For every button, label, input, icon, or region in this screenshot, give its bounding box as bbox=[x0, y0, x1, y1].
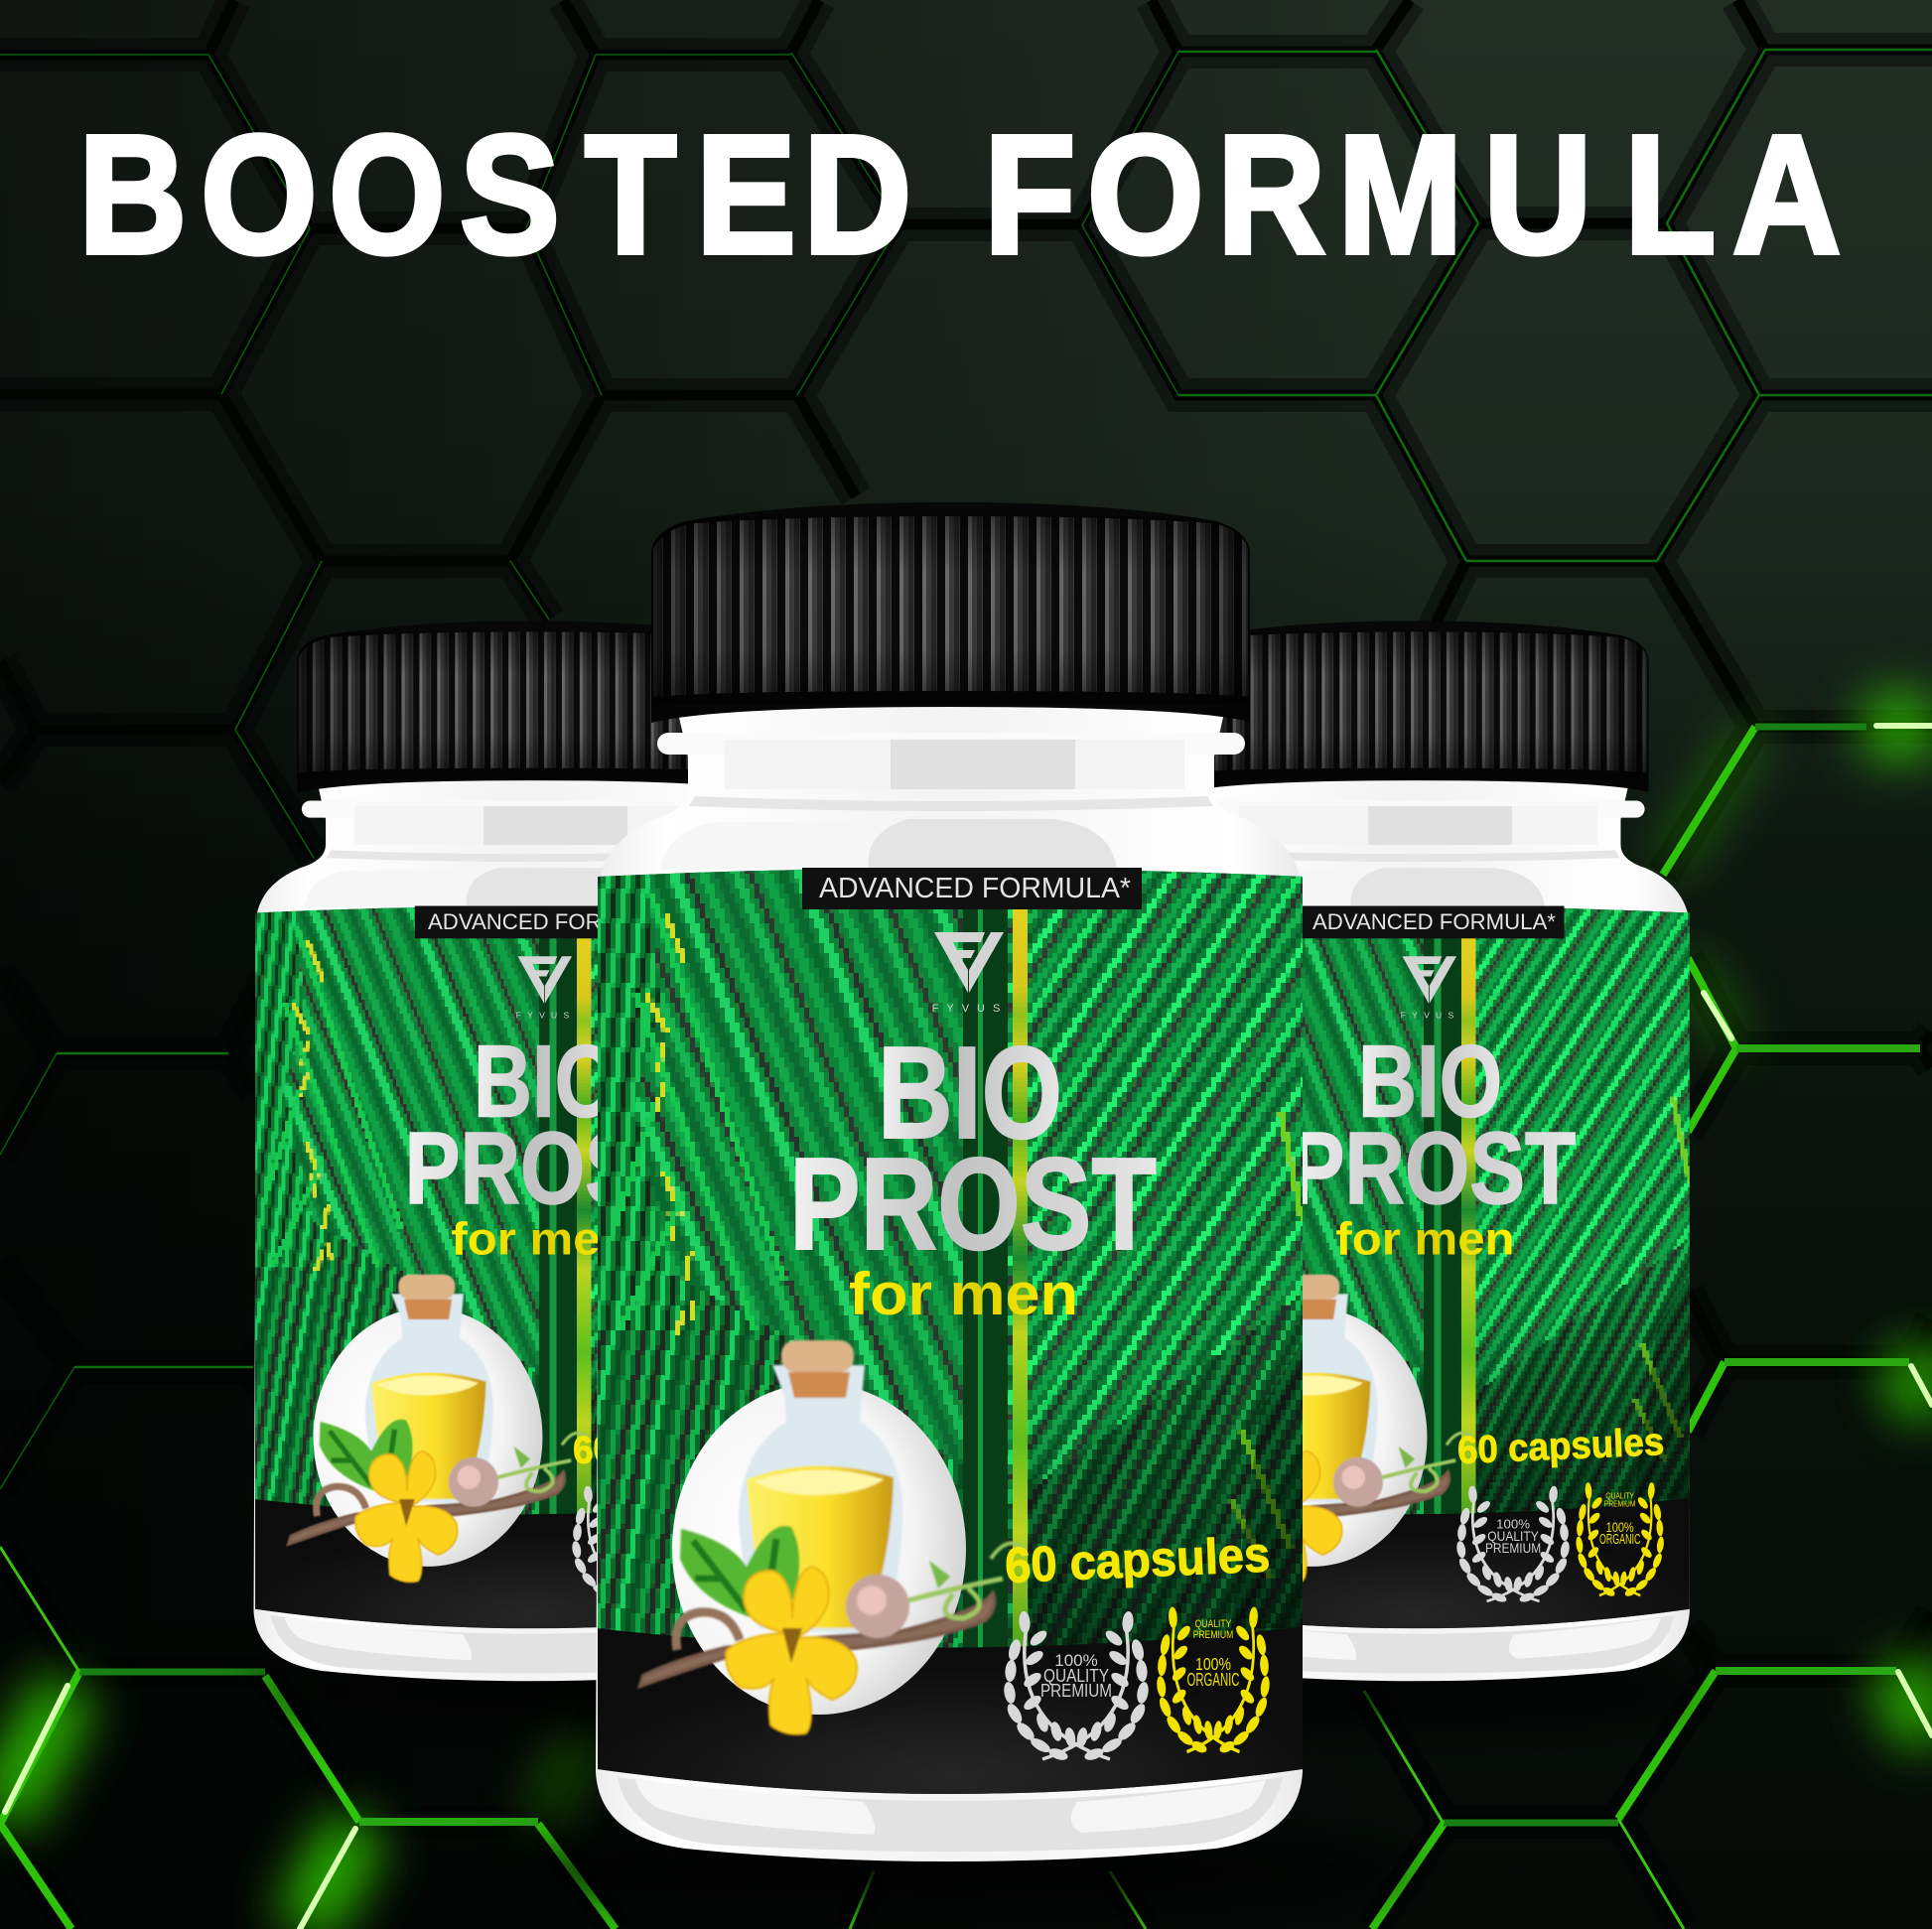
left bottle bbox=[253, 617, 808, 1681]
right bottle: silver badge: QUALITY bbox=[1487, 1528, 1539, 1544]
ground shadow bbox=[248, 1669, 1698, 1901]
center bottle: gold badge: QUALITY bbox=[1195, 1618, 1232, 1630]
right bottle: silver badge: 100% bbox=[1496, 1517, 1530, 1532]
right bottle: logo: FYVUS bbox=[1401, 1011, 1459, 1021]
right bottle: product name: BIO bbox=[1358, 1025, 1502, 1139]
right bottle: gold badge: 100% bbox=[1606, 1520, 1634, 1535]
right bottle: gold badge: ORGANIC bbox=[1599, 1531, 1640, 1547]
right bottle: product name bbox=[1290, 1025, 1576, 1265]
center bottle bbox=[596, 496, 1307, 1861]
right bottle: product name: for men bbox=[1335, 1213, 1515, 1265]
right bottle: advanced formula tag: ADVANCED FORMULA* bbox=[1312, 909, 1556, 934]
center bottle: product name: PROST bbox=[789, 1131, 1157, 1277]
left bottle: logo: FYVUS bbox=[516, 1011, 575, 1021]
left bottle: product name: BIO bbox=[474, 1025, 618, 1139]
left bottle: advanced formula tag: ADVANCED FORMULA* bbox=[428, 909, 671, 934]
right bottle: product name: PROST bbox=[1290, 1111, 1576, 1225]
right bottle: silver badge bbox=[1455, 1485, 1571, 1603]
center bottle: silver badge: QUALITY bbox=[1043, 1666, 1109, 1686]
left bottle: capsule count: 60 capsules bbox=[572, 1421, 780, 1472]
right bottle: silver badge: PREMIUM bbox=[1485, 1540, 1541, 1556]
center bottle: gold badge: PREMIUM bbox=[1193, 1629, 1233, 1641]
center bottle: advanced formula tag: ADVANCED FORMULA* bbox=[819, 873, 1131, 904]
center bottle: logo: FYVUS bbox=[932, 1003, 1008, 1015]
left bottle: product name: PROST bbox=[405, 1111, 691, 1225]
center bottle: gold badge: ORGANIC bbox=[1186, 1669, 1240, 1690]
right bottle: botanical illustration bbox=[1173, 1275, 1472, 1582]
left bottle: silver badge bbox=[571, 1485, 686, 1603]
left bottle: product name bbox=[405, 1025, 691, 1265]
right bottle: capsule count: 60 capsules bbox=[1456, 1421, 1665, 1472]
center bottle: silver badge bbox=[1003, 1611, 1150, 1762]
center bottle: gold badge: 100% bbox=[1195, 1656, 1231, 1675]
left bottle: product name: for men bbox=[451, 1213, 630, 1265]
center bottle: product name: for men bbox=[849, 1261, 1078, 1327]
right bottle: gold badge: QUALITY bbox=[1605, 1491, 1634, 1501]
background: glowing green hexagon edges bbox=[0, 726, 1932, 1929]
right bottle: logo bbox=[1401, 956, 1459, 1021]
right bottle: gold badge: PREMIUM bbox=[1604, 1499, 1635, 1509]
center bottle: silver badge: 100% bbox=[1054, 1651, 1098, 1670]
center bottle: product name bbox=[789, 1020, 1157, 1327]
left bottle: botanical illustration bbox=[289, 1275, 588, 1582]
right bottle bbox=[1138, 617, 1693, 1681]
center bottle: gold badge bbox=[1156, 1606, 1271, 1755]
center bottle: product name: BIO bbox=[878, 1020, 1062, 1166]
right bottle: gold badge bbox=[1575, 1482, 1665, 1598]
center bottle: silver badge: PREMIUM bbox=[1040, 1681, 1112, 1701]
center bottle: botanical illustration bbox=[640, 1340, 1025, 1734]
center bottle: capsule count: 60 capsules bbox=[1004, 1526, 1271, 1593]
title: BOOSTED FORMULA bbox=[78, 100, 1841, 289]
center bottle: logo bbox=[932, 932, 1008, 1015]
left bottle: logo bbox=[516, 956, 575, 1021]
